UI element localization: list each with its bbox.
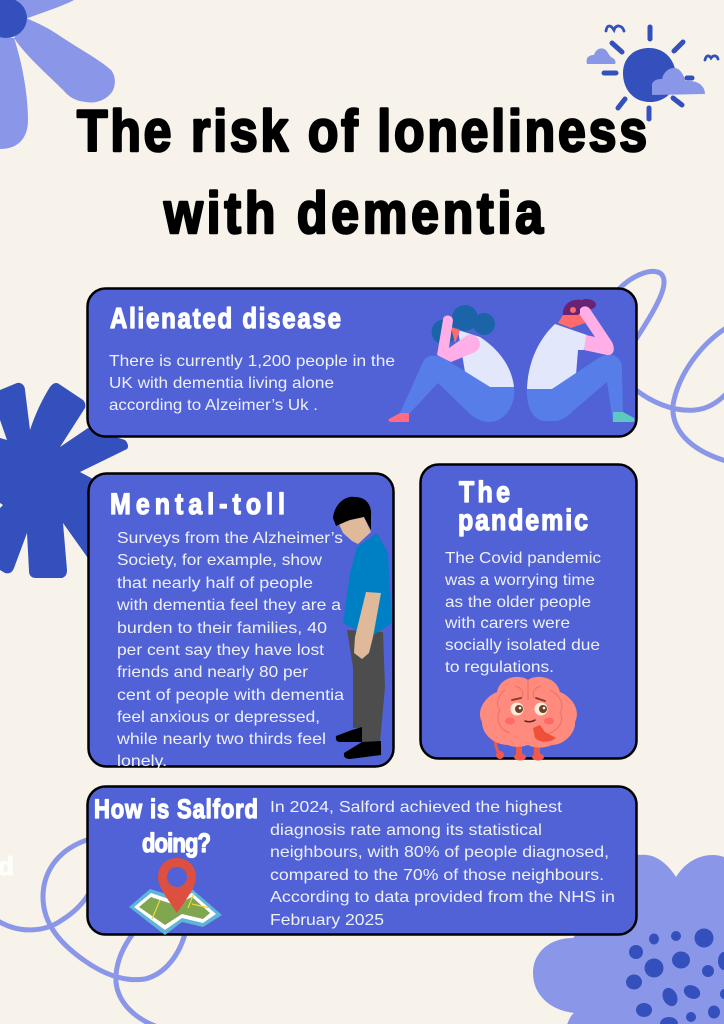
text block: mental toll: per cent say they have lost xyxy=(117,642,325,659)
panel: alienated disease xyxy=(88,288,636,436)
text block: alienated disease: according to Alzeimer’s Uk . xyxy=(109,397,318,414)
icon: sun with clouds xyxy=(587,26,718,119)
heading: how is Salford doing: doing? xyxy=(142,829,211,859)
text block: mental toll: with dementia feel they are a xyxy=(116,597,341,614)
decorative flower: top left xyxy=(0,0,115,149)
icon: map with location pin xyxy=(129,858,222,935)
text block: the pandemic: socially isolated due xyxy=(445,637,600,654)
text block: alienated disease xyxy=(109,353,395,414)
text block: mental toll: lonely. xyxy=(117,753,167,770)
icon: standing man looking down xyxy=(333,497,392,759)
title: The risk of loneliness xyxy=(77,100,647,164)
decorative loops: right xyxy=(620,271,724,461)
heading: how is Salford doing xyxy=(94,795,258,859)
decorative star: left xyxy=(0,383,128,578)
text block: mental toll: feel anxious or depressed, xyxy=(117,709,320,726)
panel: mental toll xyxy=(88,474,394,770)
text block: Salford statistics: diagnosis rate among its statistical xyxy=(270,822,542,839)
text block: mental toll: friends and nearly 80 per xyxy=(117,664,309,681)
text block: Salford statistics: February 2025 xyxy=(270,912,384,929)
text block: the pandemic: as the older people xyxy=(445,594,591,611)
title: with dementia xyxy=(163,182,544,246)
text block: mental toll: Society, for example, show xyxy=(117,552,322,569)
heading: the pandemic: pandemic xyxy=(458,503,588,537)
text block: mental toll: burden to their families, 40 xyxy=(117,620,327,637)
text block: Salford statistics xyxy=(270,799,615,929)
heading: mental toll: Mental-toll xyxy=(110,487,285,521)
panel: the pandemic xyxy=(420,464,636,760)
heading: the pandemic xyxy=(458,475,588,537)
text block: alienated disease: There is currently 1,200 people in the xyxy=(109,353,395,370)
text block: alienated disease: UK with dementia living alone xyxy=(109,375,334,392)
icon: worried brain xyxy=(480,677,577,760)
icon: sad seated man xyxy=(527,299,634,422)
heading: the pandemic: The xyxy=(459,475,510,509)
heading: alienated disease: Alienated disease xyxy=(110,302,341,335)
text block: the pandemic: The Covid pandemic xyxy=(445,550,601,567)
text block: the pandemic: to regulations. xyxy=(445,659,554,676)
text block: mental toll: Surveys from the Alzheimer’s xyxy=(117,530,343,547)
text block: the pandemic xyxy=(444,550,601,676)
decorative loops: bottom left xyxy=(0,839,186,1024)
text block: the pandemic: was a worrying time xyxy=(444,572,595,589)
heading: how is Salford doing: How is Salford xyxy=(94,795,258,825)
panel: how is Salford doing xyxy=(88,786,636,935)
icon: sad seated woman xyxy=(388,305,514,422)
text block: Salford statistics: According to data provided from the NHS in xyxy=(270,889,615,906)
text block: mental toll: cent of people with dementia xyxy=(117,687,344,704)
text block: Salford statistics: compared to the 70% of those neighbours. xyxy=(270,867,604,884)
text block: the pandemic: with carers were xyxy=(444,615,570,632)
decorative flower: bottom right xyxy=(533,850,724,1024)
title xyxy=(77,100,647,246)
text block: mental toll: while nearly two thirds feel xyxy=(116,731,326,748)
text block: Salford statistics: In 2024, Salford achieved the highest xyxy=(270,799,563,816)
text block: Salford statistics: neighbours, with 80% of people diagnosed, xyxy=(270,844,609,861)
text block: mental toll: that nearly half of people xyxy=(117,575,313,592)
text block: mental toll xyxy=(116,530,344,770)
